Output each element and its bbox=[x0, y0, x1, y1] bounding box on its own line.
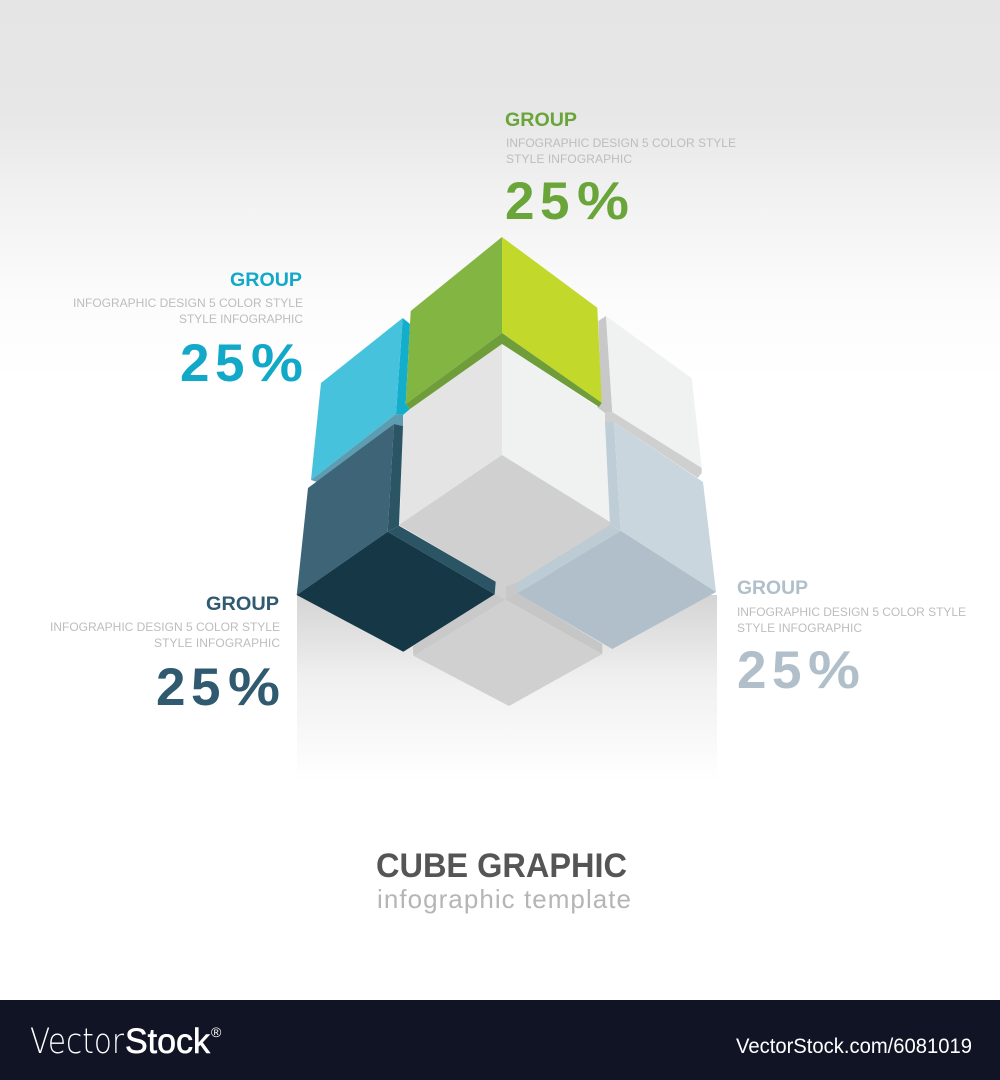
label: green group bbox=[505, 109, 736, 231]
segment: dark blue bbox=[297, 424, 496, 652]
segment: light blue bbox=[517, 422, 716, 649]
registered mark: ® bbox=[211, 1024, 222, 1040]
label: dark blue group: GROUP bbox=[206, 593, 279, 615]
title: CUBE GRAPHIC bbox=[376, 847, 627, 885]
label: light blue group: 25 bbox=[737, 641, 801, 700]
label: light blue group: STYLE INFOGRAPHIC bbox=[737, 621, 862, 635]
floor shadow bbox=[297, 595, 717, 782]
title: infographic template bbox=[377, 884, 631, 914]
logo bbox=[30, 1022, 210, 1062]
label: green group: INFOGRAPHIC DESIGN 5 COLOR STYLE bbox=[506, 136, 736, 150]
label: dark blue group: STYLE INFOGRAPHIC bbox=[154, 636, 280, 650]
label: blue group: 25 bbox=[180, 334, 244, 393]
segment: green bbox=[406, 237, 602, 409]
watermark bar bbox=[0, 1000, 1000, 1080]
label: blue group: INFOGRAPHIC DESIGN 5 COLOR STYLE bbox=[73, 296, 303, 310]
label: green group: STYLE INFOGRAPHIC bbox=[506, 152, 632, 166]
label: light blue group: % bbox=[808, 641, 860, 700]
label: dark blue group: 25 bbox=[156, 658, 220, 717]
logo: Stock bbox=[125, 1022, 210, 1061]
label: blue group: STYLE INFOGRAPHIC bbox=[179, 312, 303, 326]
label: blue group bbox=[73, 269, 303, 393]
segment: center white interior bbox=[399, 344, 611, 600]
label: light blue group bbox=[737, 577, 966, 700]
label: blue group: % bbox=[251, 334, 303, 393]
image id: VectorStock.com/6081019 bbox=[736, 1035, 972, 1058]
label: green group: % bbox=[577, 172, 629, 231]
logo: Vector bbox=[30, 1022, 125, 1062]
label: dark blue group bbox=[50, 593, 280, 717]
label: dark blue group: INFOGRAPHIC DESIGN 5 COLOR STYLE bbox=[50, 620, 280, 634]
segment: white top right bbox=[597, 316, 702, 478]
segment: front grey base bbox=[413, 593, 602, 706]
label: blue group: GROUP bbox=[230, 269, 302, 291]
label: light blue group: INFOGRAPHIC DESIGN 5 COLOR STYLE bbox=[737, 605, 966, 619]
title bbox=[376, 847, 631, 914]
label: green group: 25 bbox=[505, 172, 569, 231]
label: green group: GROUP bbox=[505, 109, 577, 131]
label: light blue group: GROUP bbox=[737, 577, 808, 599]
cube graphic bbox=[297, 237, 716, 706]
label: dark blue group: % bbox=[228, 658, 280, 717]
segment: blue bbox=[311, 318, 410, 482]
